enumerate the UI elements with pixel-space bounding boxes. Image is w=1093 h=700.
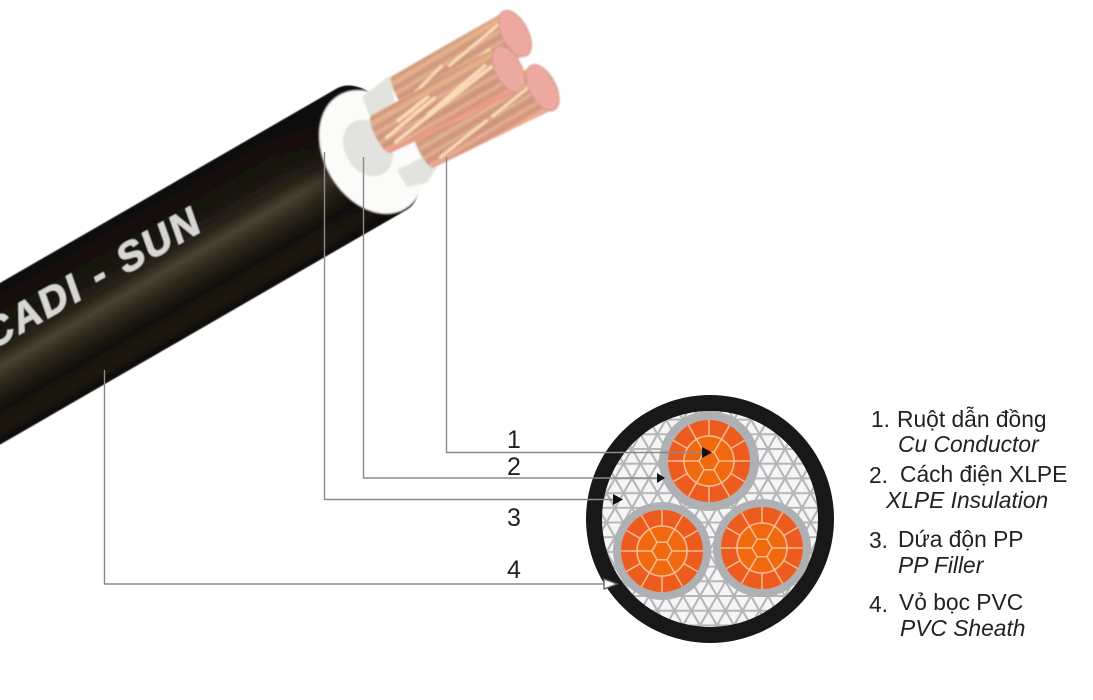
copper conductor middle	[364, 41, 531, 159]
callout numbers: 2	[507, 453, 521, 481]
cross-section diagram	[586, 395, 834, 643]
cable jacket	[0, 69, 440, 450]
legend item 3: PP Filler	[898, 552, 985, 578]
callout numbers: 4	[507, 556, 521, 584]
legend item 4	[869, 589, 1025, 641]
leader line 4	[104, 370, 617, 589]
leader line 3	[324, 152, 623, 505]
grey core insulation	[333, 75, 437, 187]
legend item 3: 3.	[869, 527, 888, 553]
copper conductor bottom	[408, 60, 566, 174]
legend item 1: 1.	[871, 406, 890, 432]
callout numbers	[507, 426, 521, 584]
legend	[869, 406, 1067, 641]
legend item 4: PVC Sheath	[900, 615, 1025, 641]
leader line 1	[446, 157, 712, 458]
PP filler mesh	[602, 411, 818, 627]
legend item 1: Cu Conductor	[898, 431, 1040, 457]
legend item 2: XLPE Insulation	[885, 487, 1048, 513]
outer PVC sheath	[586, 395, 834, 643]
legend item 2	[869, 461, 1067, 513]
core right	[713, 499, 811, 597]
legend item 1: Ruột dẫn đồng	[897, 406, 1047, 432]
legend item 2: 2.	[869, 462, 888, 488]
legend item 3: Dứa độn PP	[898, 526, 1024, 552]
cable illustration	[0, 5, 566, 450]
callout numbers: 1	[507, 426, 521, 454]
copper conductors	[364, 5, 566, 174]
legend item 4: Vỏ bọc PVC	[899, 589, 1023, 615]
legend item 1	[871, 406, 1047, 457]
core left	[613, 502, 711, 600]
core top	[659, 411, 759, 511]
white inner sheath	[297, 71, 447, 233]
callout numbers: 3	[507, 504, 521, 532]
legend item 2: Cách điện XLPE	[900, 461, 1067, 487]
leader line 2	[364, 157, 665, 483]
copper conductor top	[385, 5, 538, 118]
legend item 4: 4.	[869, 591, 888, 617]
legend item 3	[869, 526, 1024, 578]
